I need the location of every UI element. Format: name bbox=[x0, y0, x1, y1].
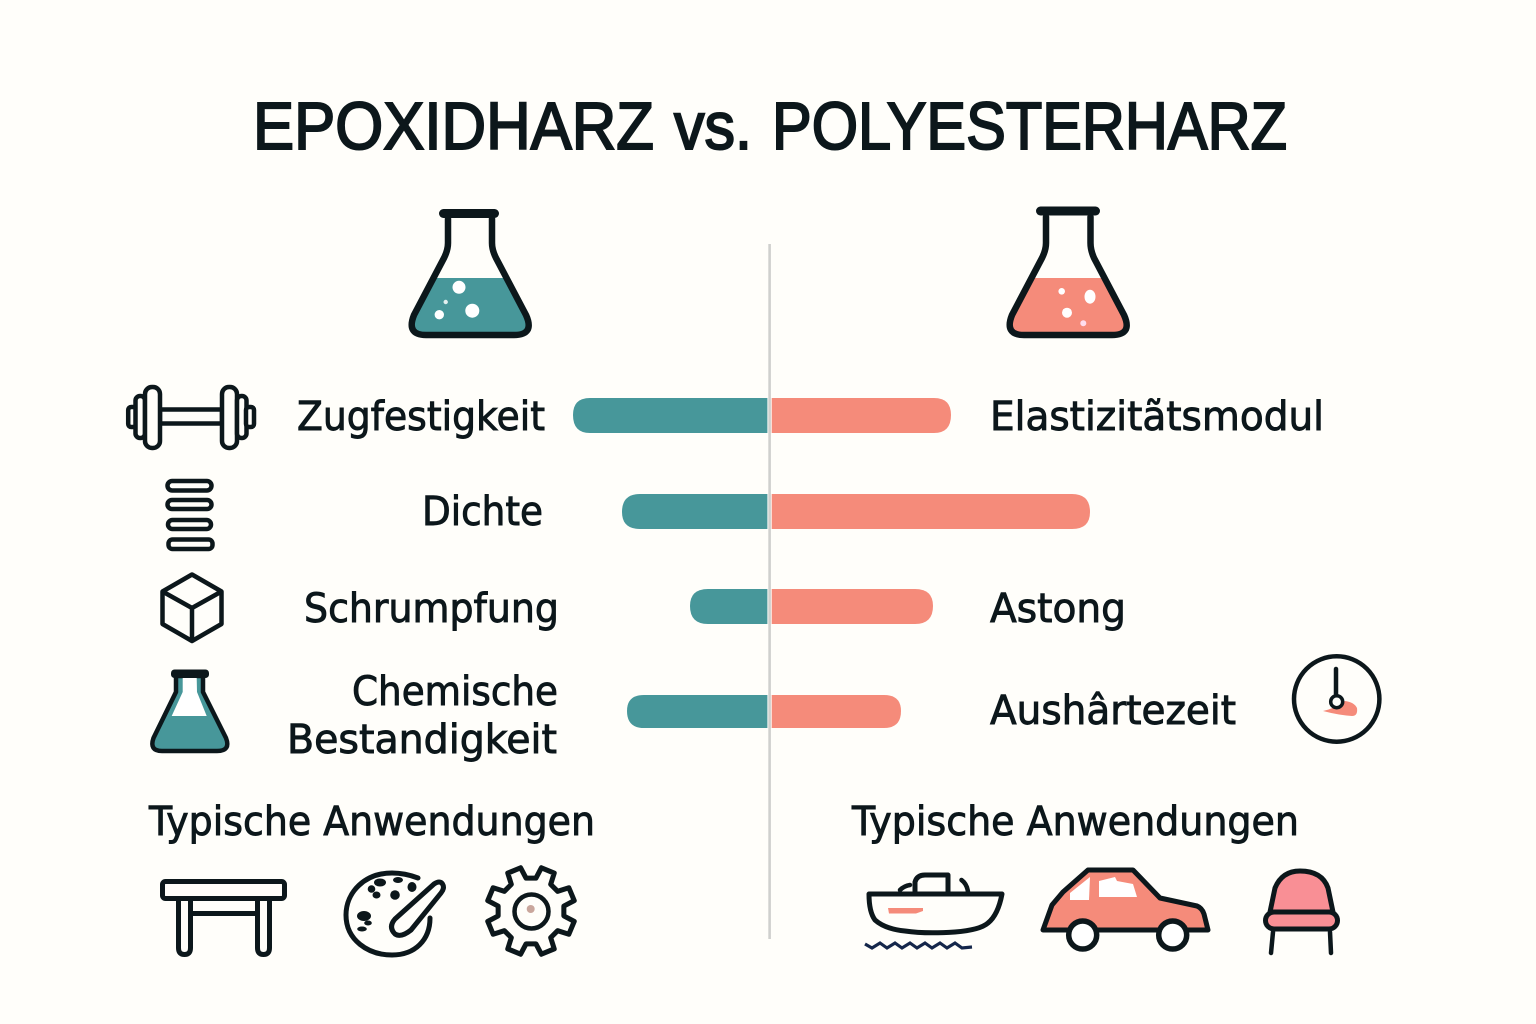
icon: coral flask bbox=[1010, 206, 1127, 335]
icon: small teal flask bbox=[152, 670, 227, 751]
bar: Dichte polyester bbox=[772, 494, 1090, 529]
bar: Aushärtezeit polyester bbox=[772, 695, 901, 728]
bar: Zugfestigkeit epoxy bbox=[573, 398, 767, 433]
icon: dumbbell bbox=[128, 387, 254, 448]
title bbox=[253, 89, 1287, 164]
label: Chemische Bestandigkeit: Chemische bbox=[352, 669, 558, 715]
bar: Astong polyester bbox=[772, 589, 933, 624]
label: Elastizitätsmodul: Elastizitãtsmodul bbox=[990, 394, 1324, 440]
icon: cube bbox=[162, 574, 222, 641]
label: Zugfestigkeit: Zugfestigkeit bbox=[297, 394, 545, 440]
icon: stacked layers bbox=[168, 481, 212, 549]
icon: gear bbox=[488, 868, 574, 954]
center divider line bbox=[768, 244, 771, 939]
label: Schrumpfung: Schrumpfung bbox=[304, 586, 559, 632]
label: Astong: Astong bbox=[990, 586, 1126, 632]
icon: table bbox=[162, 882, 284, 954]
icon: palette and brush bbox=[346, 873, 443, 955]
heading: Typische Anwendungen right: Typische Anwendungen bbox=[851, 799, 1299, 845]
icon: clock bbox=[1294, 656, 1379, 742]
bar: Dichte epoxy bbox=[622, 494, 767, 529]
icon: teal flask bbox=[412, 209, 529, 335]
label: Dichte: Dichte bbox=[422, 489, 543, 535]
label: Chemische Bestandigkeit: Bestandigkeit bbox=[287, 717, 557, 763]
bar: Schrumpfung epoxy bbox=[690, 589, 767, 624]
label: Aushärtezeit: Aushârtezeit bbox=[990, 688, 1236, 734]
label: Chemische Bestandigkeit bbox=[287, 669, 558, 763]
icon: car bbox=[1043, 870, 1208, 949]
heading: Typische Anwendungen left: Typische Anwendungen bbox=[148, 799, 595, 845]
bar: Elastizitätsmodul polyester bbox=[772, 398, 951, 433]
title: EPOXIDHARZ bbox=[253, 89, 654, 164]
title: POLYESTERHARZ bbox=[772, 89, 1287, 164]
icon: chair bbox=[1266, 871, 1338, 953]
title: vs. bbox=[674, 89, 752, 164]
bar: Chemische Bestandigkeit epoxy bbox=[627, 695, 767, 728]
icon: boat bbox=[865, 875, 1002, 948]
